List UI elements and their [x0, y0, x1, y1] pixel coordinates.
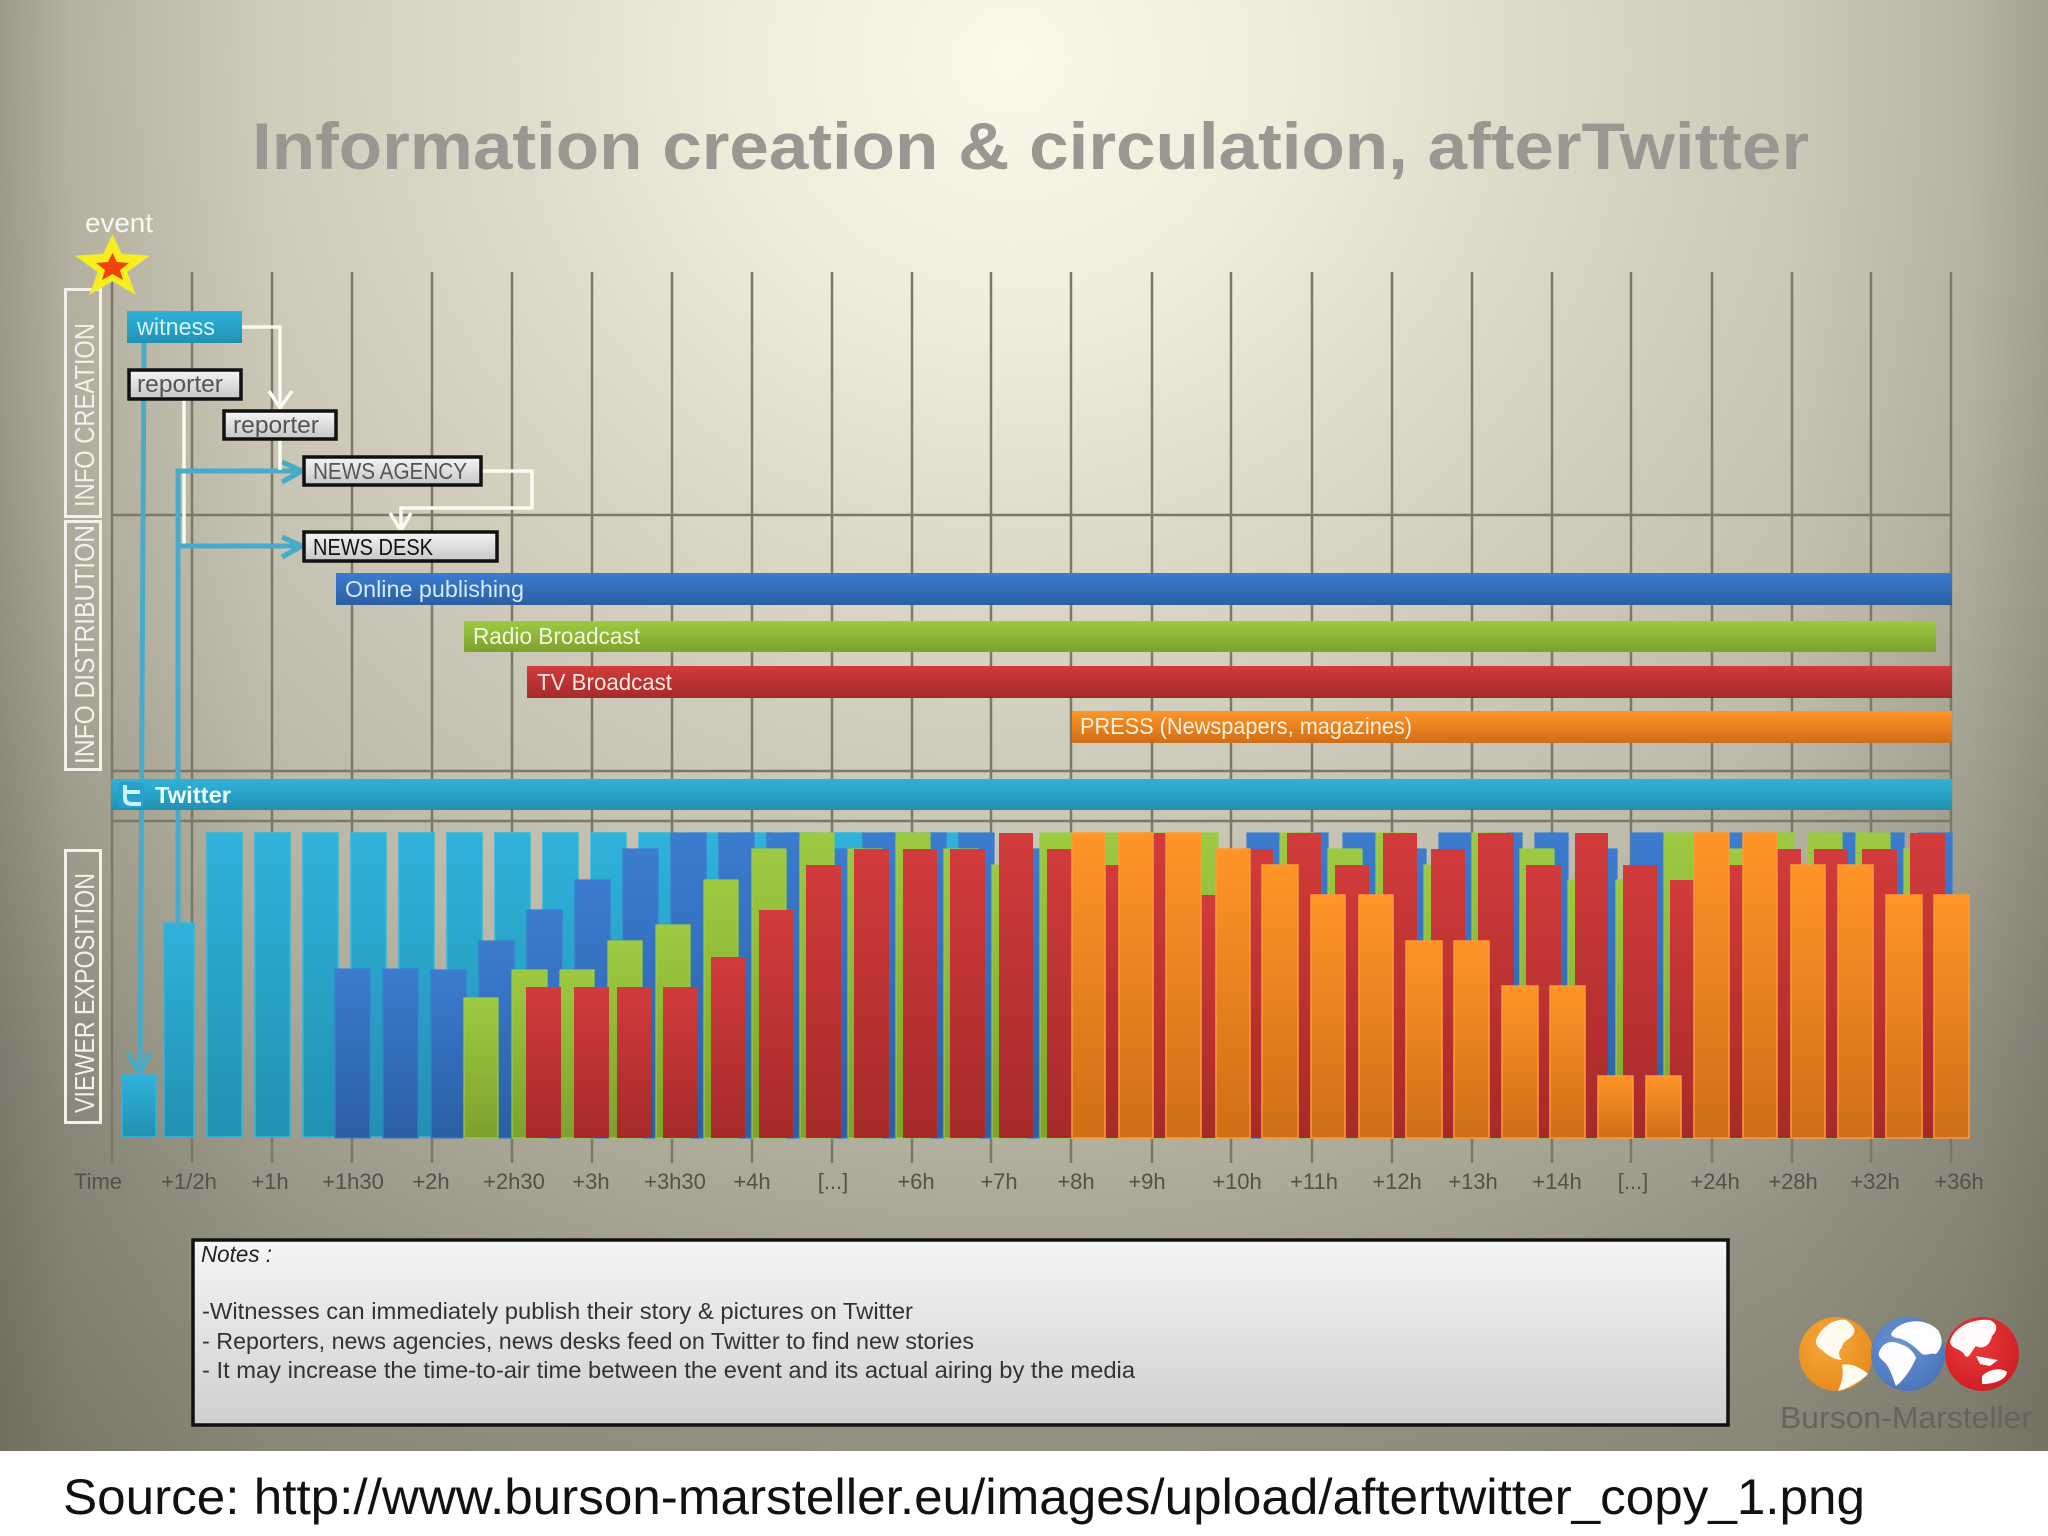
press exposure bars: [1072, 833, 1969, 1138]
arrow: twitter feed to news agency and desk: [178, 462, 302, 925]
node: news desk: [304, 532, 497, 561]
bar: radio broadcast: [464, 621, 1936, 652]
time axis labels: Time: [74, 1169, 122, 1194]
time axis labels: [...]: [818, 1169, 848, 1194]
arrow: witness to viewers on twitter: [127, 343, 150, 1073]
bar: press: [1072, 711, 1952, 743]
notes box: [193, 1240, 1728, 1425]
time axis labels: +3h: [572, 1169, 610, 1194]
time axis labels: +1h: [251, 1169, 289, 1194]
time axis labels: [74, 1169, 1984, 1194]
arrow: reporter to news agency: [278, 440, 282, 470]
twitter exposure bars: [122, 833, 962, 1137]
time axis labels: +1/2h: [161, 1169, 217, 1194]
time axis labels: [...]: [1618, 1169, 1648, 1194]
bar: radio broadcast: Radio Broadcast: [473, 623, 641, 649]
time axis labels: +9h: [1128, 1169, 1166, 1194]
node: reporter: reporter: [137, 371, 223, 398]
time axis labels: +2h: [412, 1169, 450, 1194]
radio exposure bars: [464, 833, 1938, 1138]
icon: twitter bird badge: [118, 782, 144, 808]
arrow: witness to reporter: [241, 327, 292, 408]
time axis labels: +10h: [1212, 1169, 1262, 1194]
time axis labels: +14h: [1532, 1169, 1582, 1194]
source line: Source: http://www.burson-marsteller.eu/images/upload/aftertwitter_copy_1.png: [63, 1469, 1865, 1525]
icon: red globe: [1945, 1317, 2019, 1391]
bar: press: PRESS (Newspapers, magazines): [1080, 713, 1412, 739]
node: second reporter: reporter: [233, 412, 319, 439]
time axis labels: +2h30: [483, 1169, 545, 1194]
notes box: -Witnesses can immediately publish their story & pictures on Twitter: [202, 1298, 913, 1324]
icon: orange globe: [1799, 1317, 1873, 1391]
side label: info creation: INFO CREATION: [69, 323, 100, 507]
time axis labels: +32h: [1850, 1169, 1900, 1194]
event marker: event: [85, 208, 154, 238]
notes box: - Reporters, news agencies, news desks feed on Twitter to find new stories: [202, 1328, 974, 1354]
title: Information creation & circulation, afterTwitter: [252, 109, 1809, 183]
event marker: [76, 208, 154, 294]
side label: viewer exposition: VIEWER EXPOSITION: [69, 873, 100, 1113]
time axis labels: +8h: [1057, 1169, 1095, 1194]
notes box: - It may increase the time-to-air time between the event and its actual airing by the media: [202, 1357, 1135, 1383]
tv exposure bars: [526, 833, 1945, 1138]
bar: online publishing: [336, 573, 1952, 605]
node: witness: witness: [136, 314, 215, 341]
bar: online publishing: Online publishing: [345, 576, 524, 602]
time axis labels: +6h: [897, 1169, 935, 1194]
time axis labels: +4h: [733, 1169, 771, 1194]
arrow: news agency to news desk: [390, 471, 532, 531]
icon: blue globe: [1871, 1317, 1945, 1391]
node: news desk: NEWS DESK: [313, 534, 434, 560]
icon: event star: [76, 235, 149, 294]
time axis labels: +1h30: [322, 1169, 384, 1194]
node: witness: [127, 311, 242, 343]
bar: tv broadcast: TV Broadcast: [537, 669, 673, 695]
bar: twitter: [111, 779, 1952, 810]
time axis labels: +7h: [980, 1169, 1018, 1194]
burson-marsteller logo: Burson-Marsteller: [1780, 1400, 2032, 1435]
time axis labels: +24h: [1690, 1169, 1740, 1194]
notes box: Notes :: [201, 1241, 272, 1267]
chart grid: [112, 272, 1952, 1163]
arrow: reporter to news desk: [182, 400, 186, 546]
viewer exposition bar chart: [122, 833, 1969, 1138]
time axis labels: +13h: [1448, 1169, 1498, 1194]
time axis labels: +36h: [1934, 1169, 1984, 1194]
time axis labels: +28h: [1768, 1169, 1818, 1194]
bar: twitter: Twitter: [155, 782, 231, 808]
side label: info distribution: INFO DISTRIBUTION: [69, 525, 100, 764]
node: news agency: NEWS AGENCY: [313, 458, 467, 484]
online exposure bars: [335, 833, 1952, 1138]
time axis labels: +3h30: [644, 1169, 706, 1194]
node: reporter: [129, 370, 241, 399]
time axis labels: +11h: [1290, 1169, 1338, 1194]
time axis labels: +12h: [1372, 1169, 1422, 1194]
burson-marsteller logo: [1780, 1317, 2032, 1435]
bar: tv broadcast: [527, 666, 1952, 698]
